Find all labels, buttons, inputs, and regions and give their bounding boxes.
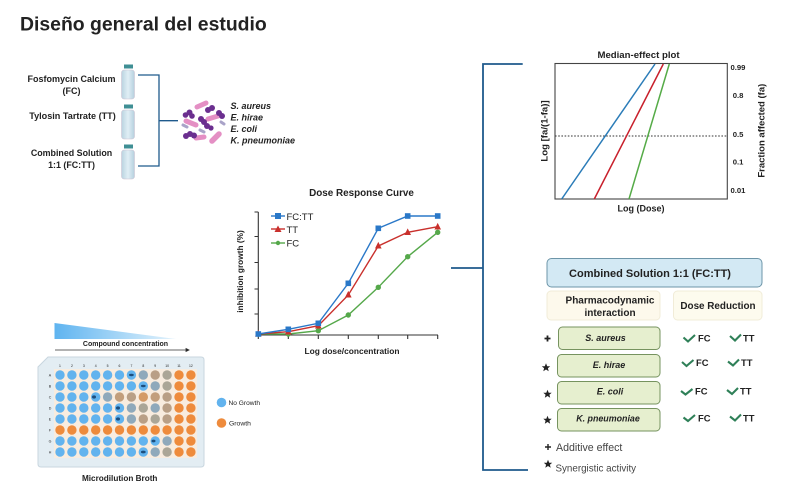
wells row G <box>55 436 196 446</box>
label: bacteria species: K. pneumoniae <box>230 136 295 146</box>
header: pharmacodynamic interaction <box>547 291 660 320</box>
right ticks: 0.01 <box>730 186 746 195</box>
line red <box>594 64 663 199</box>
right ticks: 0.5 <box>733 130 744 139</box>
line green <box>629 64 669 199</box>
plate column numbers: 8 <box>142 364 144 368</box>
median dotted line <box>555 135 727 137</box>
plate column numbers: 10 <box>165 364 169 368</box>
bracket: compounds to bacteria <box>138 75 178 166</box>
label: Combined Solution: 1:1 (FC:TT) <box>48 160 95 170</box>
right axis label: Fraction affected (fa) <box>756 84 768 178</box>
icon: concentration wedge <box>54 323 176 339</box>
row: K. pneumoniae: TT <box>743 412 755 424</box>
panel: combined solution results <box>542 258 762 474</box>
header: pharmacodynamic interaction: Pharmacodynamic <box>566 296 654 306</box>
series TT <box>256 224 440 336</box>
legend: synergistic activity: Synergistic activity <box>556 464 636 474</box>
header: pharmacodynamic interaction: interaction <box>584 308 636 319</box>
wells row C <box>55 392 196 402</box>
plate column numbers: 3 <box>83 364 85 368</box>
plate row letters: E <box>49 418 52 422</box>
right ticks: 0.8 <box>733 91 744 100</box>
wells row H <box>55 447 196 457</box>
legend: no growth: No Growth <box>228 400 260 407</box>
row: E. hirae: E. hirae <box>593 360 625 370</box>
plate row letters: H <box>49 450 52 454</box>
series FC <box>256 230 440 336</box>
right ticks: 0.1 <box>733 158 744 166</box>
line blue <box>562 64 655 199</box>
label: bacteria species: S. aureus <box>230 101 271 111</box>
x axis label: Log dose/concentration <box>305 346 399 356</box>
header: dose reduction: Dose Reduction <box>680 301 756 312</box>
chart: dose response curve <box>235 188 440 356</box>
plate row letters: F <box>49 428 52 432</box>
plate column numbers: 4 <box>95 364 97 368</box>
plate column numbers: 9 <box>154 364 156 368</box>
wells row A <box>55 370 196 380</box>
chart title: Median-effect plot <box>597 50 680 61</box>
label: bacteria species: E. coli <box>230 124 258 134</box>
row: K. pneumoniae <box>543 408 755 431</box>
plate column numbers: 11 <box>177 364 181 368</box>
chart legend <box>271 212 314 250</box>
header: combined solution <box>547 258 762 287</box>
plate row letters: B <box>49 384 52 388</box>
axes <box>254 212 438 339</box>
arrow: concentration direction <box>55 348 189 352</box>
plate column numbers: 6 <box>119 364 121 368</box>
plate column numbers: 12 <box>189 364 193 368</box>
legend: no growth <box>217 398 260 407</box>
wells row F <box>55 425 196 435</box>
header: combined solution: Combined Solution 1:1 (FC:TT) <box>569 268 731 280</box>
plate column numbers: 5 <box>107 364 109 368</box>
header: dose reduction <box>674 291 762 320</box>
plate column numbers: 2 <box>71 364 73 368</box>
row: S. aureus: S. aureus <box>585 333 626 343</box>
row: E. coli: FC <box>695 386 708 396</box>
icon: vial FC <box>122 64 134 99</box>
legend: growth: Growth <box>229 420 251 428</box>
right ticks <box>730 63 746 195</box>
row: K. pneumoniae: FC <box>698 412 711 424</box>
icon: bacteria cluster <box>183 103 225 141</box>
plate row letters: C <box>49 396 52 400</box>
row: K. pneumoniae: K. pneumoniae <box>576 414 640 424</box>
plate column numbers: 7 <box>130 364 132 368</box>
title: Diseño general del estudio <box>20 14 267 36</box>
label: Combined Solution: Combined Solution <box>31 148 112 158</box>
plate row letters: D <box>49 406 52 410</box>
row: S. aureus: FC <box>698 332 711 344</box>
row: S. aureus <box>544 327 755 350</box>
label: microdilution broth: Microdilution Broth <box>82 474 157 483</box>
label: bacteria species: E. hirae <box>230 112 263 122</box>
series FC:TT <box>256 214 440 336</box>
chart legend: FC <box>286 238 299 250</box>
chart legend: TT <box>286 225 298 236</box>
legend: additive effect: Additive effect <box>556 442 622 454</box>
chart title: Dose Response Curve <box>309 188 414 199</box>
plate: 96 wells <box>38 357 204 467</box>
panel: microdilution <box>38 323 260 483</box>
plate column numbers: 1 <box>59 364 61 368</box>
chart: median-effect plot <box>540 50 768 214</box>
left axis label: Log [fa/(1-fa)] <box>540 100 550 162</box>
row: E. hirae: TT <box>741 357 753 368</box>
icon: vial combined <box>122 144 134 179</box>
row: E. coli <box>543 382 752 404</box>
plot frame <box>555 64 727 199</box>
row: E. hirae: FC <box>696 357 709 368</box>
label: compound concentration: Compound concentration <box>83 341 168 348</box>
bottom axis label: Log (Dose) <box>618 204 664 214</box>
plate row letters: G <box>49 440 52 444</box>
right ticks: 0.99 <box>730 63 745 72</box>
label: Fosfomycin Calcium: Fosfomycin Calcium <box>27 74 116 84</box>
label: Fosfomycin Calcium: (FC) <box>62 86 80 96</box>
legend: synergistic activity <box>544 460 636 474</box>
wells row D <box>55 403 196 413</box>
wells row B <box>55 381 196 391</box>
plate row letters: A <box>49 374 51 378</box>
chart legend: FC:TT <box>286 212 314 223</box>
legend: growth <box>217 418 251 428</box>
y axis label: inhibition growth (%) <box>235 230 245 313</box>
wells row E <box>55 414 196 424</box>
row: E. coli: E. coli <box>597 386 624 396</box>
row: E. coli: TT <box>740 386 752 396</box>
row: S. aureus: TT <box>743 332 755 344</box>
icon: vial TT <box>122 104 134 139</box>
row: E. hirae <box>542 354 753 377</box>
bracket: chart to results <box>451 64 528 470</box>
panel: compounds and bacteria <box>27 64 295 179</box>
label: Tylosin Tartrate: Tylosin Tartrate (TT) <box>29 111 116 121</box>
